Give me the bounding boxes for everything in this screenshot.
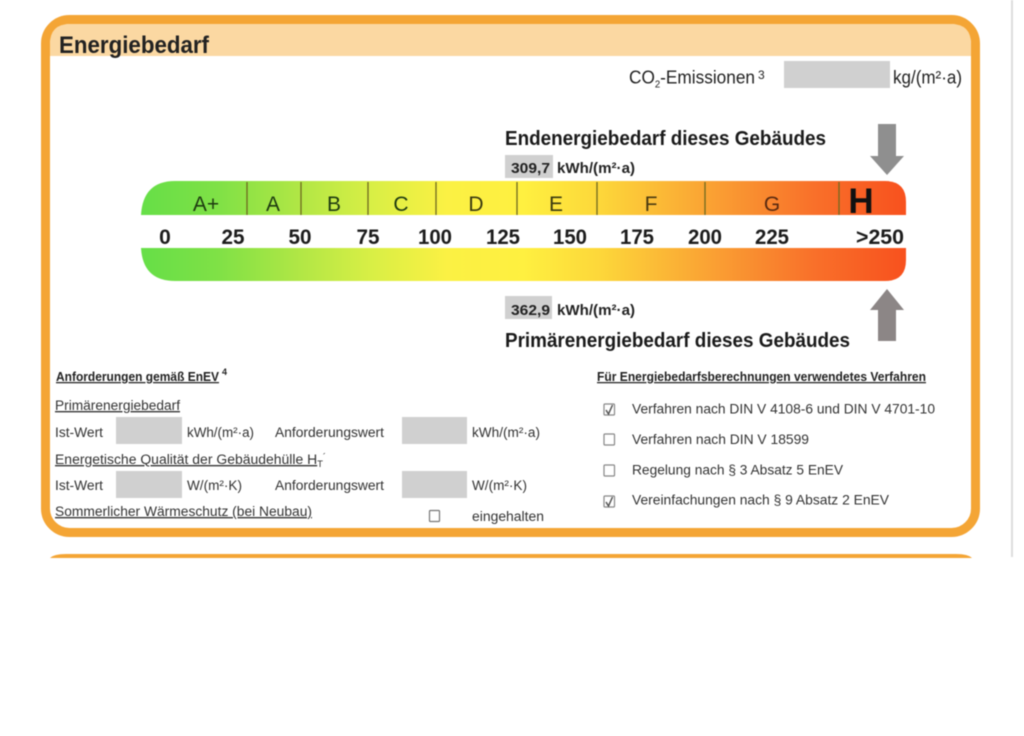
row: Primärenergiebedarf values: kWh/(m²·a)	[187, 425, 254, 440]
lower scale bar	[141, 248, 906, 281]
scale numbers: 100	[418, 226, 452, 249]
option 3: Regelung nach § 3 Absatz 5 EnEV	[632, 462, 843, 478]
Primärenergiebedarf value: 362,9	[511, 302, 550, 319]
row: Primärenergiebedarf values: Ist-Wert	[55, 425, 103, 440]
row heading: Gebäudehülle: T	[317, 459, 323, 469]
row: Gebäudehülle values: W/(m²·K)	[187, 478, 242, 493]
row heading: Gebäudehülle: ´	[323, 452, 326, 462]
Primärenergiebedarf value	[505, 296, 635, 319]
CO2 emissions row	[629, 61, 962, 90]
Endenergiebedarf heading: Endenergiebedarf dieses Gebäudes	[505, 128, 826, 150]
class labels: A	[266, 193, 280, 216]
class labels: E	[549, 193, 563, 216]
scale numbers: 0	[159, 226, 171, 249]
class labels: C	[393, 193, 409, 216]
option 4 checked: Vereinfachungen nach § 9 Absatz 2 EnEV	[632, 492, 889, 508]
class labels: D	[468, 193, 484, 216]
CO2 emissions row: -Emissionen	[660, 68, 755, 88]
panel: Energiebedarf	[46, 20, 976, 532]
CO2 emissions row: kg/(m²·a)	[893, 68, 962, 88]
icon: arrow down	[870, 124, 904, 175]
row heading: Primärenergiebedarf: Primärenergiebedarf	[55, 398, 180, 413]
row: Gebäudehülle values: Anforderungswert	[275, 478, 384, 493]
row: Primärenergiebedarf values: kWh/(m²·a)	[472, 425, 540, 440]
scale numbers: 175	[620, 226, 654, 249]
header band	[50, 24, 971, 56]
scale numbers: 150	[553, 226, 587, 249]
scale numbers: 25	[222, 226, 245, 249]
class labels: H	[848, 182, 874, 221]
scale numbers: 75	[356, 226, 380, 249]
row: Gebäudehülle values	[55, 471, 527, 498]
section heading: Für Energiebedarfsberechnungen verwendetes Verfahren	[597, 370, 926, 384]
option 1 checked: Verfahren nach DIN V 4108-6 und DIN V 4701-10	[632, 402, 935, 416]
CO2 emissions row: 2	[655, 80, 661, 90]
page edge line	[1011, 0, 1013, 557]
upper scale bar	[141, 181, 906, 221]
Endenergiebedarf value: 309,7	[511, 160, 550, 177]
section: Anforderungen gemäß EnEV	[55, 367, 544, 524]
row: Primärenergiebedarf values: Anforderungswert	[275, 425, 384, 440]
Endenergiebedarf value: kWh/(m²·a)	[557, 160, 635, 177]
scale numbers: 50	[288, 226, 312, 249]
class labels: B	[327, 193, 341, 216]
title: Energiebedarf	[59, 32, 210, 59]
section: Verfahren	[597, 370, 935, 508]
scale numbers: >250	[856, 226, 904, 249]
scale numbers: 125	[486, 226, 520, 249]
section heading: Anforderungen gemäß EnEV	[56, 370, 220, 384]
section heading: 4	[222, 367, 227, 377]
row: Gebäudehülle values: W/(m²·K)	[472, 478, 527, 493]
next panel top edge	[50, 554, 972, 558]
CO2 emissions row: 3	[758, 68, 765, 82]
class labels: F	[645, 193, 657, 216]
row: Sommerlicher Wärmeschutz: Sommerlicher Wärmeschutz (bei Neubau)	[55, 504, 312, 519]
row: Sommerlicher Wärmeschutz	[55, 504, 544, 524]
Primärenergiebedarf value: kWh/(m²·a)	[557, 302, 635, 319]
Endenergiebedarf value	[505, 155, 635, 178]
scale numbers: 200	[688, 226, 722, 249]
scale numbers	[159, 226, 904, 249]
icon: arrow up	[870, 289, 904, 341]
row: Gebäudehülle values: Ist-Wert	[55, 478, 103, 493]
class labels: G	[764, 193, 780, 216]
class labels: A+	[193, 193, 219, 216]
row: Primärenergiebedarf values	[55, 417, 540, 444]
Primärenergiebedarf heading: Primärenergiebedarf dieses Gebäudes	[505, 330, 850, 352]
CO2 emissions row: CO	[629, 68, 656, 88]
class labels	[193, 182, 874, 221]
scale numbers: 225	[755, 226, 789, 249]
option 2: Verfahren nach DIN V 18599	[632, 432, 809, 447]
row heading: Gebäudehülle: Energetische Qualität der Gebäudehülle H	[55, 452, 317, 467]
row: Sommerlicher Wärmeschutz: eingehalten	[472, 509, 544, 524]
